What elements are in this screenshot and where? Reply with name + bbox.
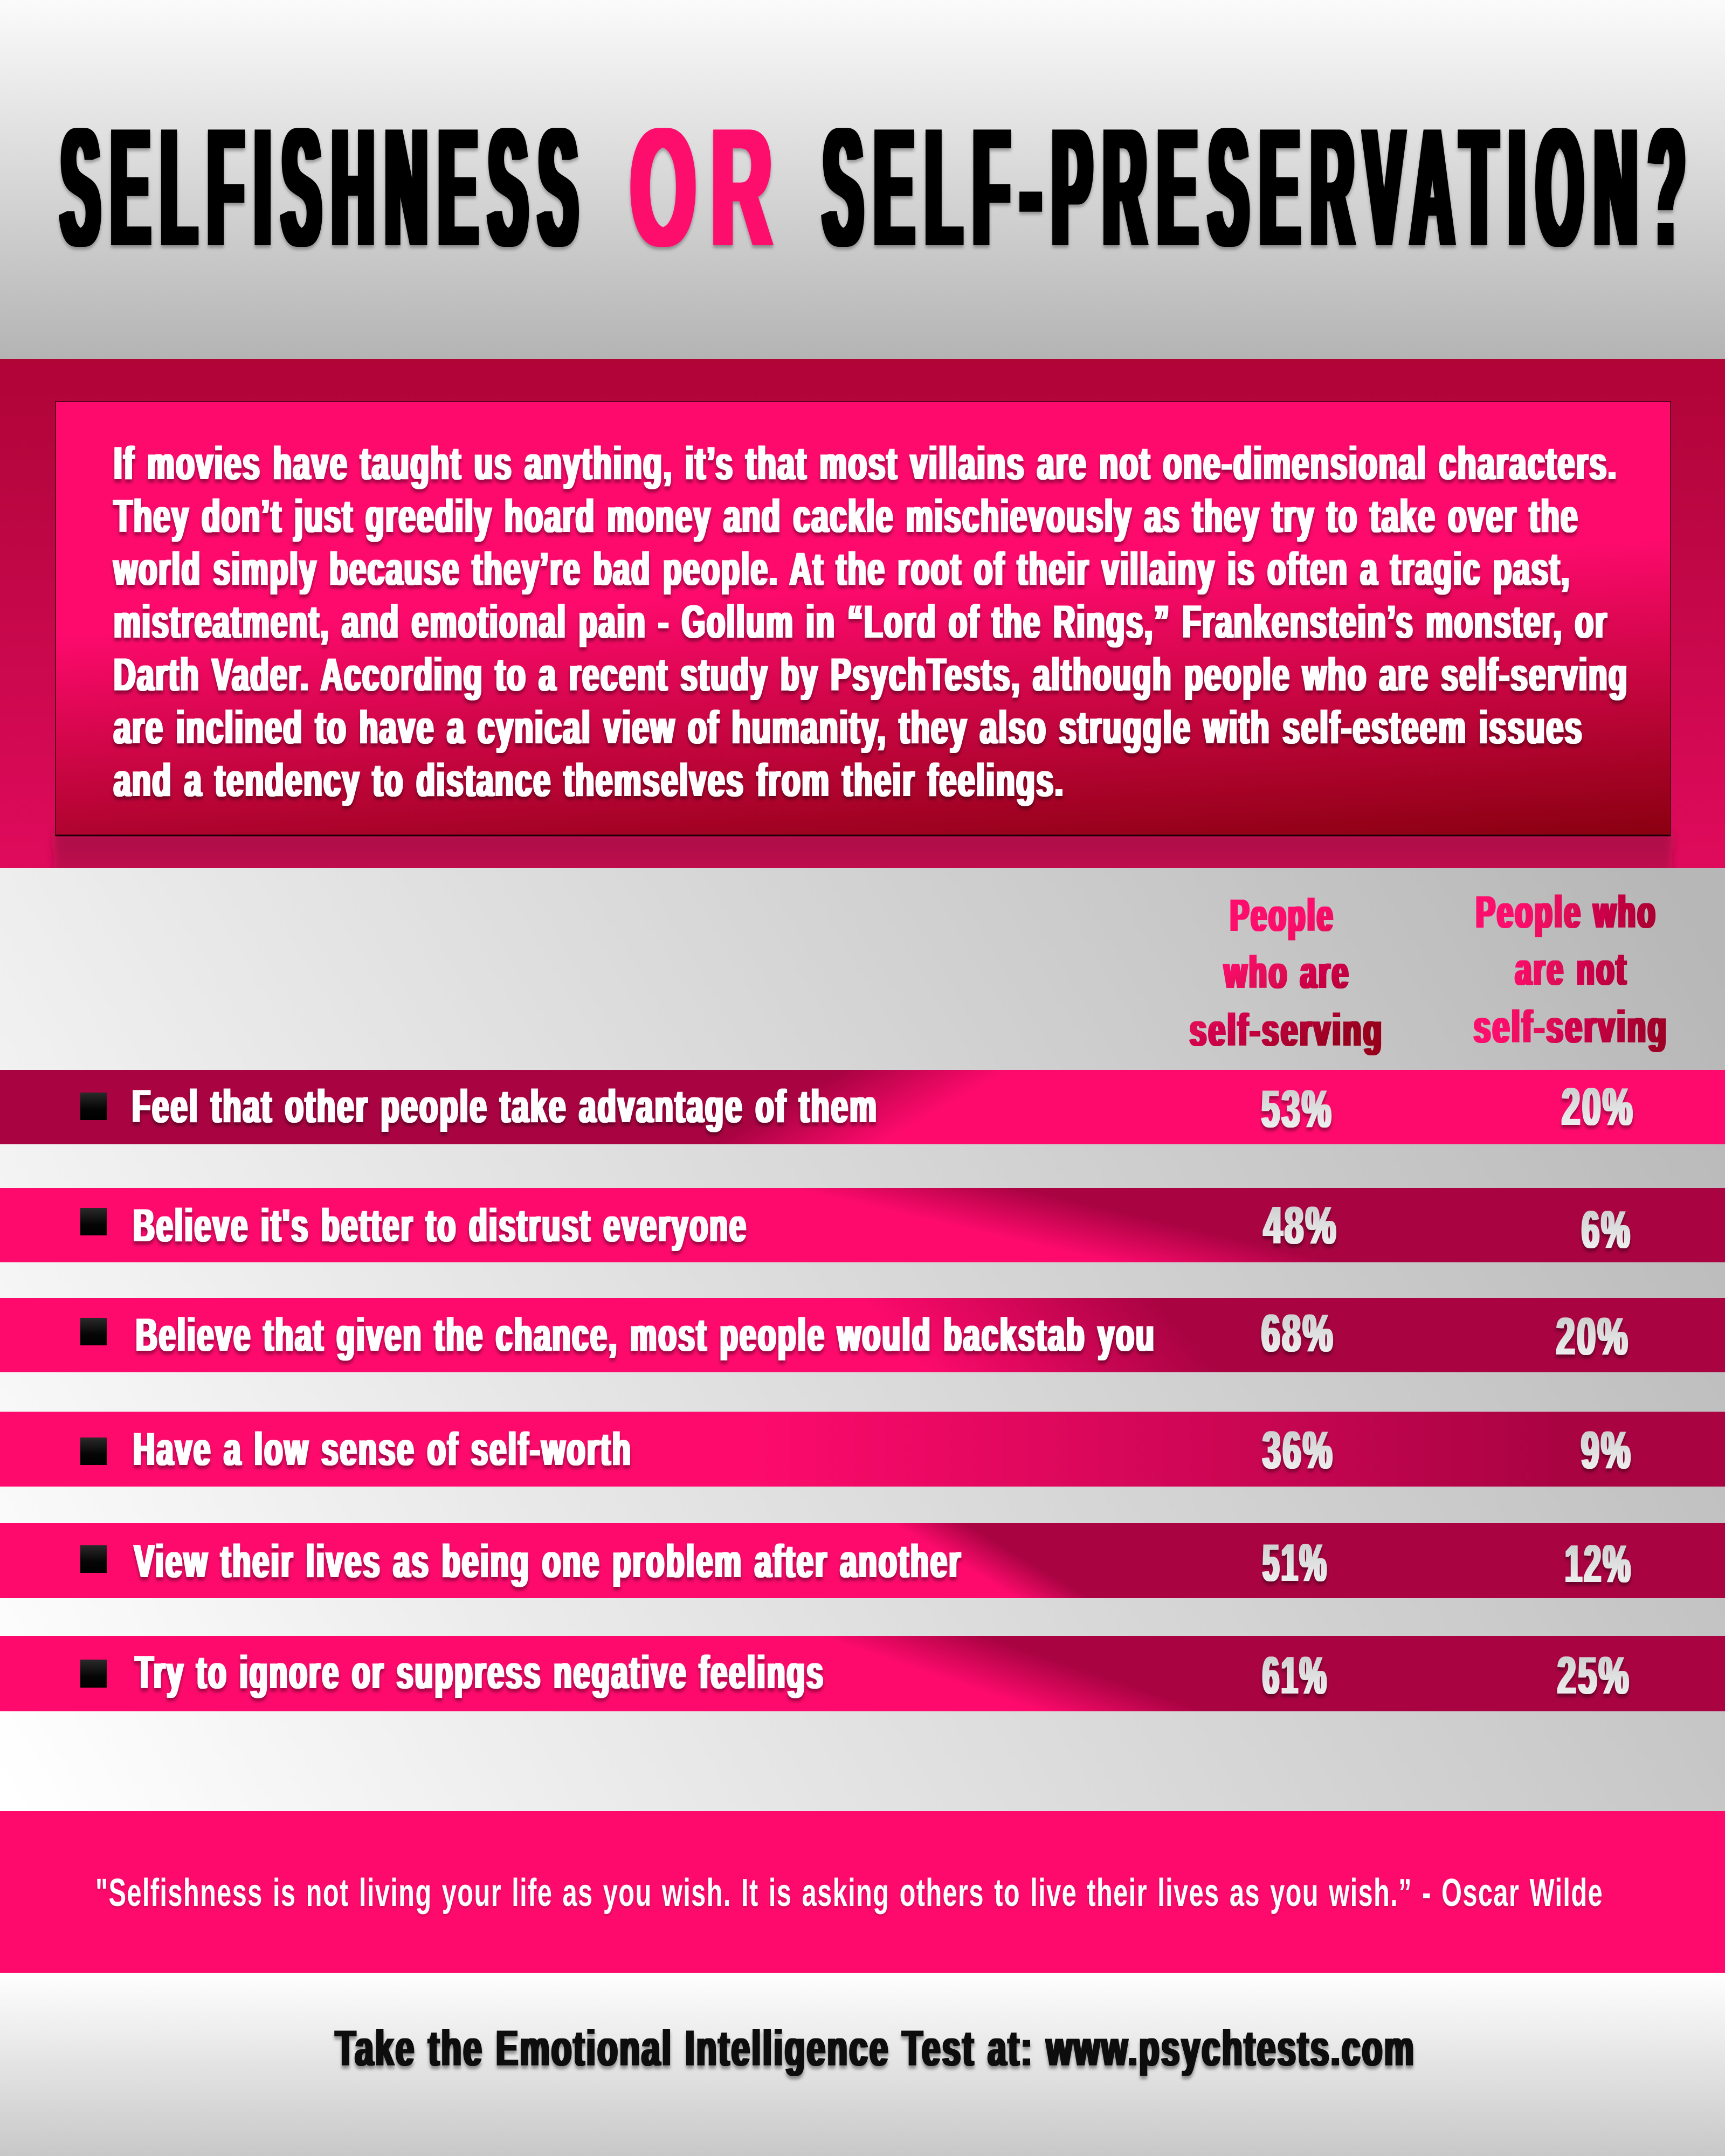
value: not self-serving: 12% [1565,1534,1632,1593]
row label: Believe that given the chance, most people would backstab you [136,1309,1156,1361]
row label: View their lives as being one problem after another [134,1536,962,1587]
value: not self-serving: 25% [1557,1646,1631,1705]
row 6 [0,1636,1725,1711]
value: self-serving: 68% [1261,1303,1335,1363]
table background [0,868,1725,1811]
value: self-serving: 36% [1262,1420,1334,1480]
column heading: people who are not self-serving: are not [1515,944,1628,994]
bullet [80,1545,107,1573]
bullet [80,1318,107,1345]
value: not self-serving: 20% [1556,1307,1630,1366]
value: not self-serving: 9% [1581,1420,1632,1480]
panel: intro band [0,359,1725,879]
column heading: people who are self-serving [1190,890,1384,1055]
bullet [80,1438,107,1465]
title: OR [631,94,788,281]
column heading: people who are self-serving: who are [1224,947,1350,998]
column heading: people who are self-serving: self-serving [1190,1005,1384,1055]
bullet [80,1208,107,1235]
panel: intro text box [56,402,1671,835]
row label: Have a low sense of self-worth [133,1423,632,1475]
header background [0,0,1725,359]
title: SELFISHNESS [61,94,589,281]
row 3 [0,1298,1725,1372]
value: not self-serving: 6% [1582,1200,1632,1259]
intro paragraph [113,438,1629,806]
intro paragraph: and a tendency to distance themselves from their feelings. [114,755,1065,806]
bullet [80,1093,107,1120]
value: not self-serving: 20% [1562,1077,1634,1136]
column heading: people who are not self-serving [1474,887,1668,1052]
row 4 [0,1412,1725,1487]
row label: Try to ignore or suppress negative feelings [135,1647,825,1698]
value: self-serving: 53% [1261,1079,1333,1138]
quote band [0,1811,1725,1973]
row 1 [0,1070,1725,1144]
row 5 [0,1523,1725,1598]
bullet [80,1660,107,1688]
footer background [0,1973,1725,2156]
value: self-serving: 51% [1262,1533,1328,1592]
row label: Believe it's better to distrust everyone [133,1200,748,1252]
value: self-serving: 61% [1262,1646,1328,1705]
column heading: people who are self-serving: People [1230,890,1335,941]
row 2 [0,1188,1725,1262]
value: self-serving: 48% [1264,1196,1338,1255]
row label: Feel that other people take advantage of them [132,1081,878,1132]
